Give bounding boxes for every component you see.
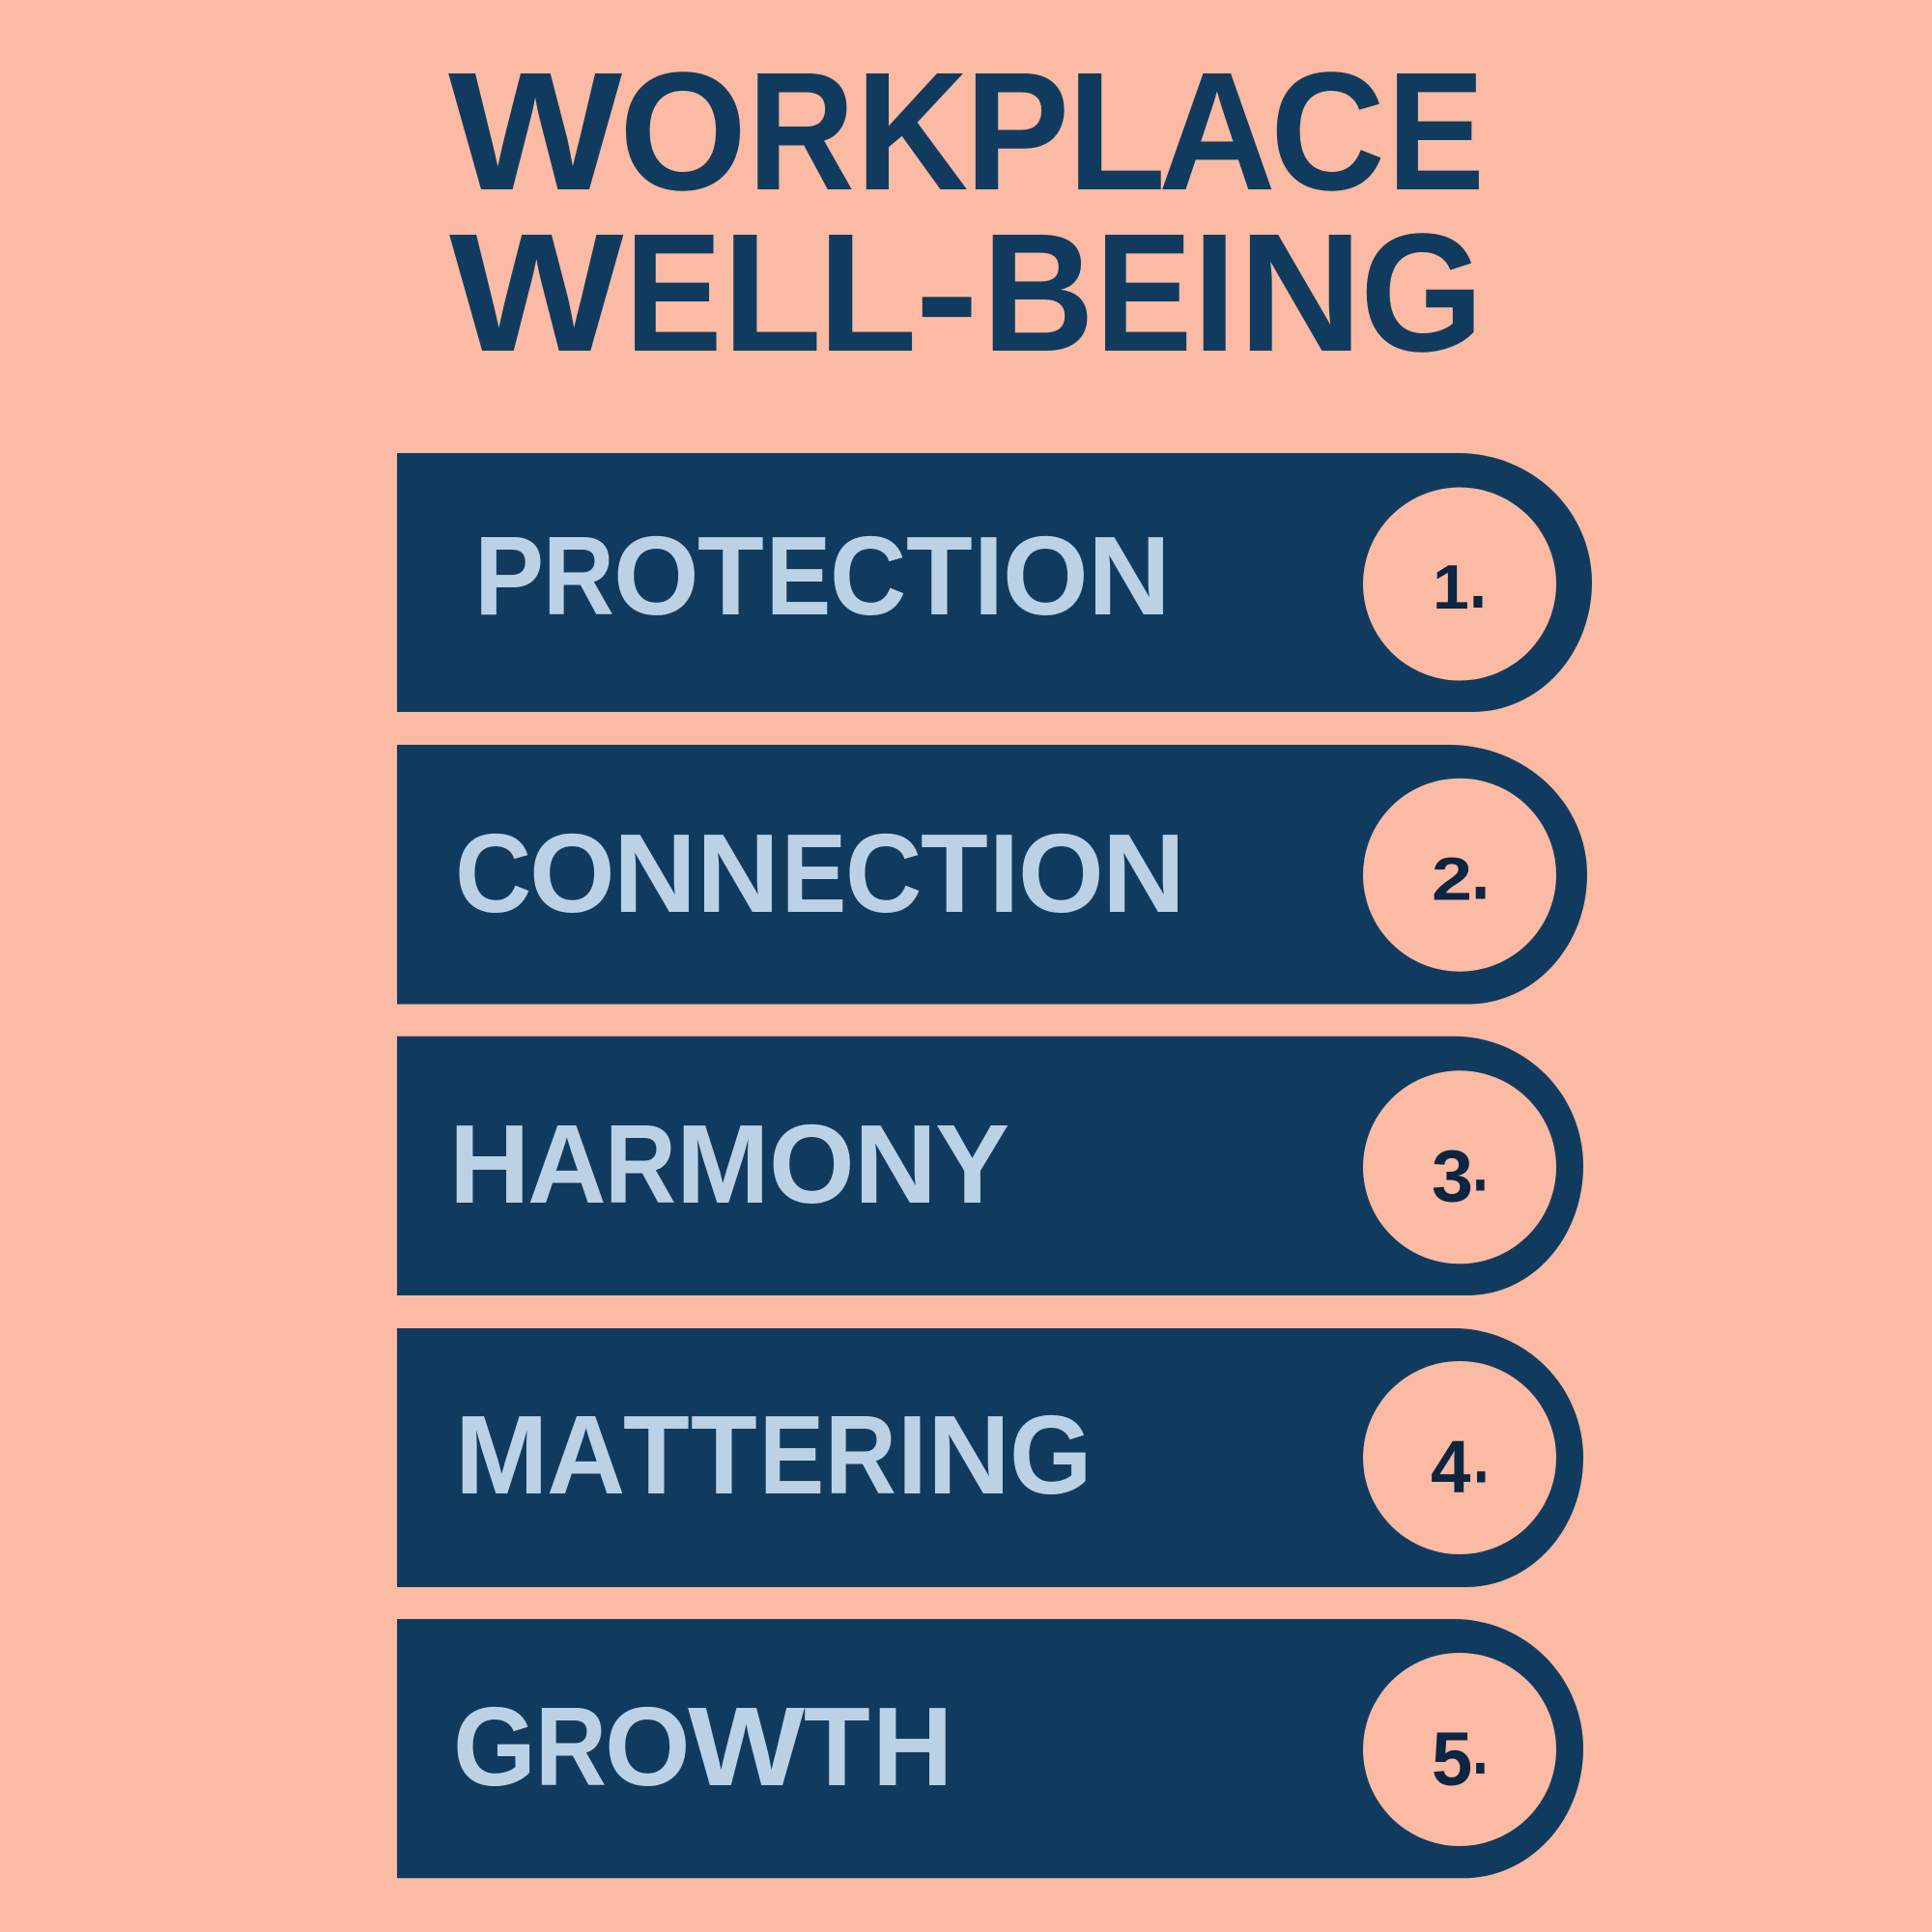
title: E bbox=[1095, 198, 1192, 386]
label: connection: C bbox=[845, 810, 922, 936]
title: G bbox=[1360, 198, 1484, 386]
label: protection: C bbox=[830, 513, 906, 639]
label: harmony: M bbox=[676, 1101, 770, 1227]
label: connection: E bbox=[781, 810, 846, 936]
bar shape bbox=[397, 1328, 1583, 1587]
number 4: . bbox=[1473, 1416, 1489, 1499]
title: B bbox=[982, 198, 1094, 386]
bar with number circle bbox=[397, 453, 1592, 712]
label: mattering: G bbox=[1009, 1392, 1092, 1518]
label: connection bbox=[455, 810, 1185, 936]
title: W bbox=[449, 198, 624, 386]
label: protection: T bbox=[906, 513, 972, 639]
bar with number circle bbox=[397, 745, 1587, 1005]
label: mattering bbox=[455, 1392, 1092, 1518]
number circle bbox=[1363, 487, 1556, 680]
label: growth: H bbox=[872, 1684, 952, 1809]
title: E bbox=[1387, 37, 1485, 225]
number circle bbox=[1363, 1361, 1556, 1554]
bar with number circle bbox=[397, 1619, 1583, 1878]
label: growth: T bbox=[804, 1684, 870, 1809]
title bbox=[448, 37, 1485, 386]
label: mattering: T bbox=[691, 1392, 756, 1518]
title: - bbox=[915, 198, 980, 386]
title: R bbox=[748, 37, 854, 225]
label: growth: R bbox=[535, 1684, 607, 1809]
title: C bbox=[1270, 37, 1385, 225]
label: protection: N bbox=[1088, 513, 1171, 639]
title: W bbox=[448, 37, 622, 225]
title: K bbox=[856, 37, 969, 225]
label: protection: O bbox=[613, 513, 698, 639]
label: mattering: M bbox=[455, 1392, 549, 1518]
number 5 bbox=[1432, 1709, 1489, 1801]
title: L bbox=[1067, 37, 1166, 225]
label: protection bbox=[474, 513, 1171, 639]
panel: growth bbox=[397, 1619, 1583, 1878]
label: protection: I bbox=[974, 513, 1004, 639]
number 1: . bbox=[1469, 538, 1487, 625]
label: harmony: R bbox=[605, 1101, 676, 1227]
label: mattering: A bbox=[547, 1392, 625, 1518]
number 1: 1 bbox=[1433, 552, 1469, 622]
bar with number circle bbox=[397, 1036, 1583, 1295]
label: growth: O bbox=[605, 1684, 691, 1809]
number 2: 2 bbox=[1432, 845, 1472, 913]
number circle bbox=[1363, 1070, 1556, 1264]
label: mattering: N bbox=[927, 1392, 1010, 1518]
label: protection: O bbox=[1003, 513, 1089, 639]
label: growth: W bbox=[688, 1684, 806, 1809]
title: O bbox=[619, 37, 748, 225]
panel: mattering bbox=[397, 1328, 1583, 1587]
number circle bbox=[1363, 1653, 1556, 1846]
label: protection: E bbox=[766, 513, 831, 639]
label: harmony: Y bbox=[935, 1101, 1009, 1227]
number 2: . bbox=[1471, 827, 1490, 917]
number 3 bbox=[1432, 1124, 1489, 1217]
title: E bbox=[625, 198, 722, 386]
number 3: . bbox=[1472, 1124, 1489, 1207]
number 4: 4 bbox=[1431, 1425, 1471, 1508]
label: mattering: E bbox=[759, 1392, 824, 1518]
label: harmony: H bbox=[449, 1101, 529, 1227]
label: growth bbox=[453, 1684, 952, 1809]
label: connection: N bbox=[696, 810, 780, 936]
label: mattering: R bbox=[825, 1392, 896, 1518]
label: connection: C bbox=[455, 810, 531, 936]
title: L bbox=[723, 198, 821, 386]
label: harmony: N bbox=[854, 1101, 937, 1227]
number 4 bbox=[1431, 1416, 1489, 1508]
label: connection: O bbox=[529, 810, 615, 936]
label: protection: R bbox=[543, 513, 614, 639]
bar shape bbox=[397, 453, 1592, 712]
panel: harmony bbox=[397, 1036, 1583, 1295]
label: protection: P bbox=[474, 513, 545, 639]
title: A bbox=[1158, 37, 1276, 225]
number 5: . bbox=[1472, 1709, 1489, 1789]
label: connection: N bbox=[1102, 810, 1185, 936]
label: mattering: T bbox=[623, 1392, 689, 1518]
bar shape bbox=[397, 1037, 1583, 1295]
title: I bbox=[1193, 198, 1236, 386]
label: connection: O bbox=[1018, 810, 1103, 936]
number 2 bbox=[1432, 827, 1490, 917]
number 5: 5 bbox=[1432, 1716, 1472, 1801]
label: harmony: O bbox=[769, 1101, 855, 1227]
number 1 bbox=[1433, 538, 1487, 625]
label: protection: T bbox=[697, 513, 764, 639]
panel: connection bbox=[397, 745, 1587, 1005]
title: L bbox=[818, 198, 917, 386]
bar shape bbox=[397, 1619, 1583, 1878]
label: mattering: I bbox=[897, 1392, 927, 1518]
title: N bbox=[1238, 198, 1363, 386]
title: P bbox=[965, 37, 1069, 225]
number 3: 3 bbox=[1432, 1135, 1473, 1217]
label: harmony bbox=[449, 1101, 1009, 1227]
label: harmony: A bbox=[527, 1101, 606, 1227]
number circle bbox=[1363, 779, 1556, 972]
panel: protection bbox=[397, 453, 1592, 712]
bar shape bbox=[397, 745, 1587, 1005]
label: connection: I bbox=[989, 810, 1019, 936]
label: connection: T bbox=[921, 810, 988, 936]
label: growth: G bbox=[453, 1684, 536, 1809]
label: connection: N bbox=[613, 810, 696, 936]
bar with number circle bbox=[397, 1328, 1583, 1587]
